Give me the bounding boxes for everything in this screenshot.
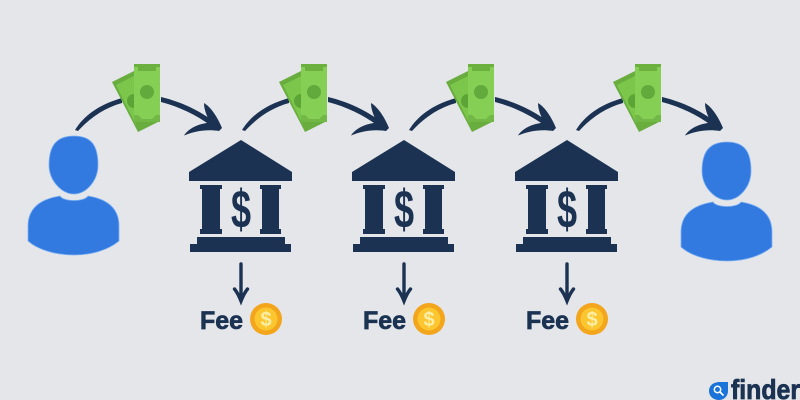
icon: bank 2: $	[394, 178, 414, 239]
icon: sender person	[28, 136, 119, 255]
icon: finder shield	[709, 382, 728, 400]
icon: banknotes 2	[279, 64, 327, 132]
icon: coin 2: $	[423, 309, 435, 331]
fee group 2	[363, 264, 445, 335]
arrow: fee 3	[560, 264, 574, 301]
icon: banknotes 3	[446, 64, 494, 132]
label: fee 3: Fee	[526, 307, 569, 335]
arrow: bank 1 to bank 2	[242, 97, 389, 136]
icon: banknotes 4	[613, 64, 661, 132]
arrow: bank 2 to bank 3	[409, 97, 556, 136]
label: fee 1: Fee	[200, 307, 243, 335]
icon: bank 1: $	[231, 178, 251, 239]
arrow: bank 3 to recipient	[576, 97, 723, 136]
icon: banknotes 1	[112, 64, 160, 132]
icon: coin 3: $	[586, 309, 598, 331]
label: fee 2: Fee	[363, 307, 406, 335]
icon: coin 1: $	[260, 309, 272, 331]
logo: finder	[709, 374, 800, 400]
icon: bank 3	[515, 140, 618, 252]
icon: bank 1	[189, 140, 292, 252]
icon: bank 2	[352, 140, 455, 252]
fee group 3	[526, 264, 608, 335]
arrow: fee 1	[234, 264, 248, 301]
arrow: fee 2	[398, 264, 410, 301]
arrow: sender to bank 1	[75, 97, 222, 136]
icon: recipient person	[681, 142, 772, 261]
icon: bank 3: $	[557, 178, 577, 239]
fee group 1	[200, 264, 282, 335]
